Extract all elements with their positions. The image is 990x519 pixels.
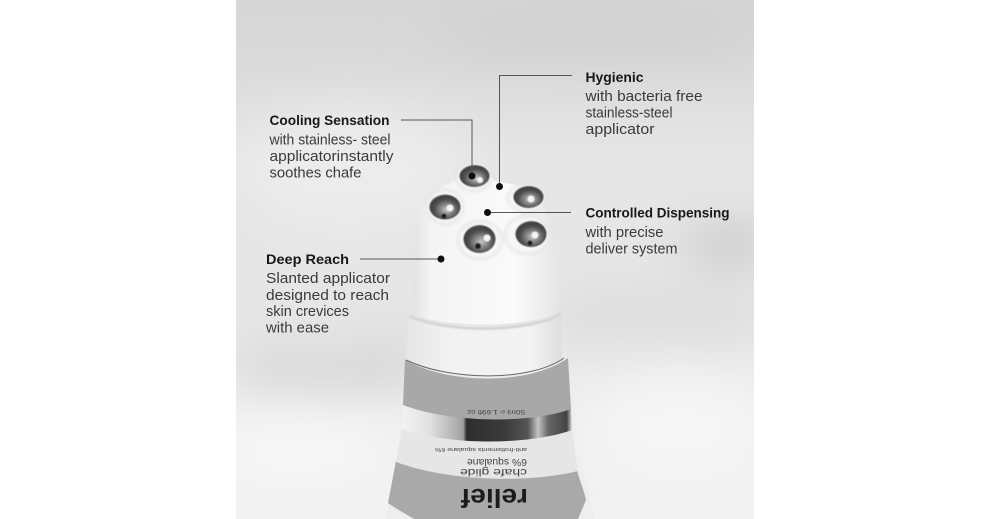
upside-down tube text: anti-frottements squalane 6%	[434, 446, 527, 452]
collar ledge	[409, 314, 561, 329]
callout: Controlled Dispensing	[484, 204, 730, 258]
callout: Hygienic	[496, 69, 702, 190]
upside-down tube text	[434, 408, 528, 513]
collar shadow line	[406, 358, 564, 376]
lower grey band	[388, 461, 586, 519]
light label band	[396, 428, 578, 479]
chrome strip	[402, 405, 572, 442]
upside-down tube text: 50ml ℮ 1.69fl oz	[467, 408, 525, 415]
upper grey band	[403, 358, 571, 419]
photo background	[210, 0, 780, 519]
callout: Hygienic: Hygienic	[586, 69, 644, 85]
upside-down tube text: 6% squalane	[467, 456, 527, 467]
callout: Cooling Sensation: soothes chafe	[270, 166, 362, 182]
callout: Hygienic: applicator	[586, 122, 655, 138]
callout: Cooling Sensation: applicatorinstantly	[270, 149, 394, 165]
product tube	[386, 163, 594, 519]
callout: Cooling Sensation: with stainless- steel	[269, 132, 390, 148]
upside-down tube text: chafe glide	[459, 466, 527, 477]
callout: Controlled Dispensing: deliver system	[586, 242, 678, 258]
callout: Deep Reach: skin crevices	[266, 304, 349, 320]
callout: Deep Reach	[265, 251, 444, 336]
ball sockets	[427, 163, 549, 259]
callout: Hygienic: with bacteria free	[584, 89, 702, 105]
upside-down tube text: relief	[461, 483, 528, 513]
callout: Deep Reach: with ease	[265, 320, 329, 336]
applicator head	[413, 164, 558, 324]
steel balls	[430, 165, 546, 253]
callout: Controlled Dispensing: Controlled Dispensing	[586, 204, 730, 220]
callout: Controlled Dispensing: with precise	[584, 225, 664, 241]
callout: Cooling Sensation	[269, 112, 476, 182]
callout: Deep Reach: Deep Reach	[266, 251, 349, 267]
callout: Cooling Sensation: Cooling Sensation	[270, 112, 390, 128]
tube bottom white body	[386, 455, 594, 519]
callout: Deep Reach: Slanted applicator	[266, 271, 390, 287]
collar	[406, 318, 562, 376]
callout: Hygienic: stainless-steel	[586, 106, 672, 122]
callout: Deep Reach: designed to reach	[266, 288, 389, 304]
